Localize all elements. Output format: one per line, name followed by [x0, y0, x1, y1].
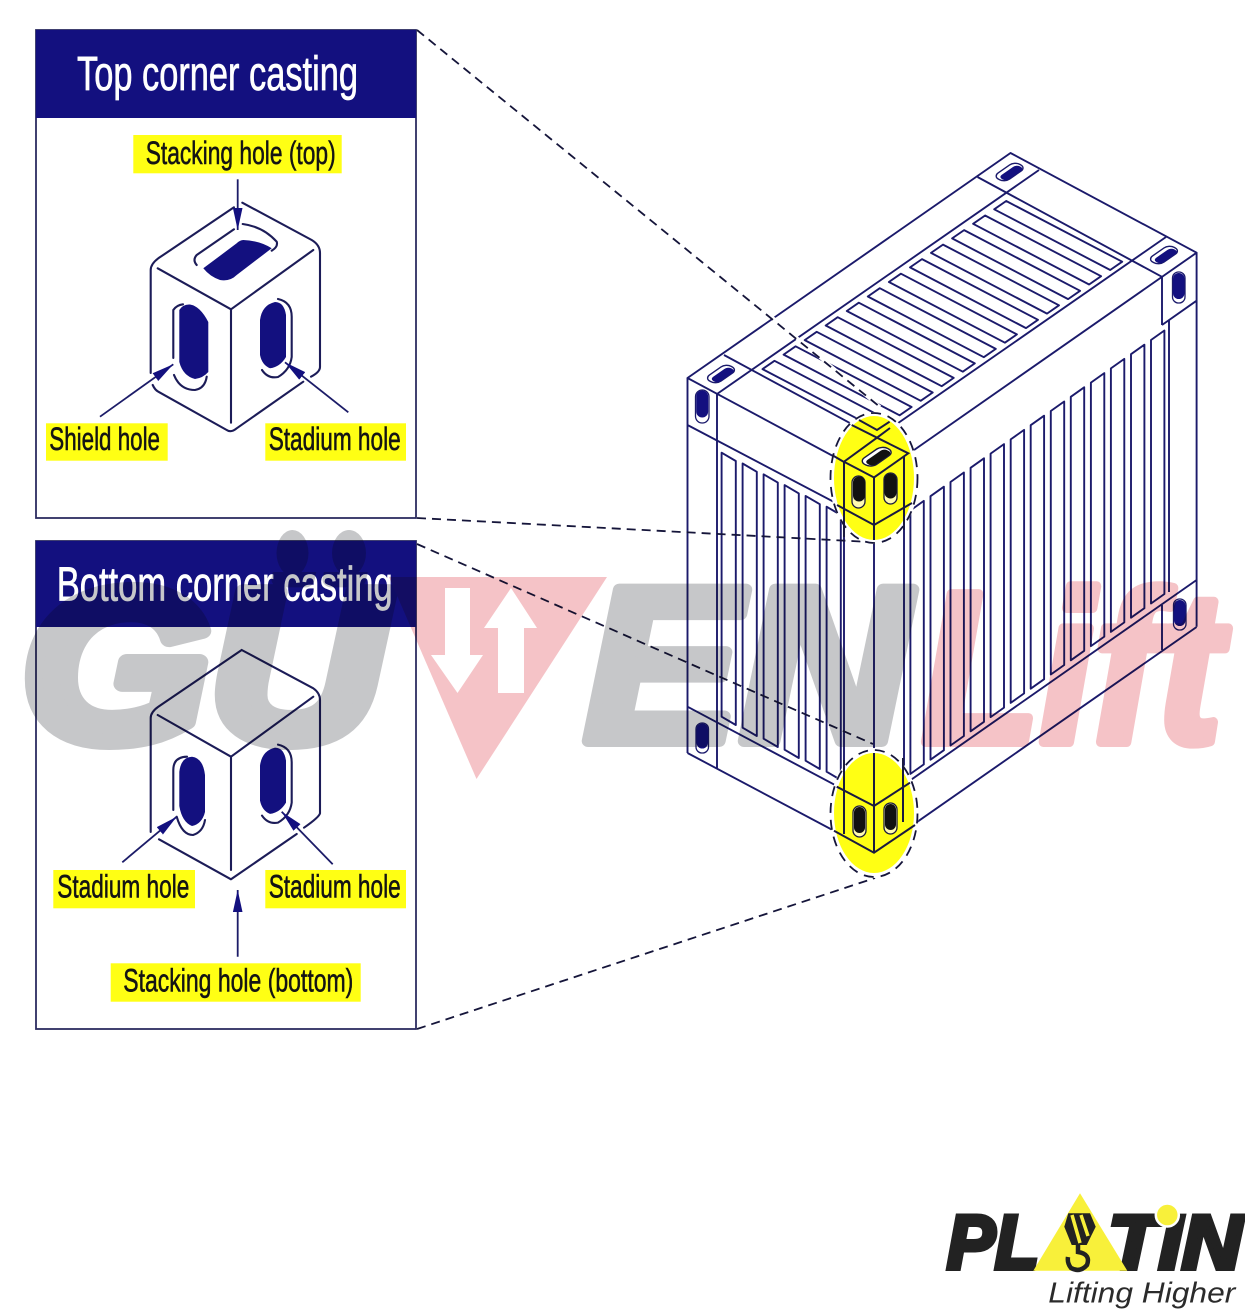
dashed connector: top panel bottom corner to container	[417, 518, 870, 542]
highlight: bottom corner casting on container	[830, 748, 918, 878]
heading: bottom corner casting: Bottom corner casting	[57, 559, 393, 612]
heading: top corner casting: Top corner casting	[77, 48, 358, 101]
arrow: to stacking hole top	[237, 179, 239, 230]
label: stacking hole bottom	[111, 963, 361, 1002]
label: stacking hole top: Stacking hole (top)	[146, 135, 336, 171]
container right face	[874, 253, 1197, 852]
dashed connector: bottom panel top corner to container	[417, 544, 873, 744]
illustration: shipping container	[688, 153, 1197, 852]
heading: bottom corner casting	[36, 541, 416, 627]
label: right stadium hole	[265, 869, 406, 908]
label: stacking hole bottom: Stacking hole (bottom)	[123, 963, 353, 999]
container left face	[688, 378, 874, 852]
label: right stadium hole: Stadium hole	[269, 869, 401, 905]
logo triangle	[1033, 1193, 1127, 1271]
logo: Platin Lifting Higher	[947, 1193, 1244, 1310]
logo wordmark left: PL	[947, 1200, 1039, 1286]
label: stacking hole top	[133, 135, 342, 173]
logo tagline: Lifting Higher	[1048, 1278, 1237, 1310]
label: shield hole: Shield hole	[49, 421, 160, 457]
icon: bottom corner casting cube	[151, 650, 320, 879]
left face corrugation ribs	[722, 453, 841, 780]
container top face	[688, 153, 1197, 478]
logo hook	[1064, 1213, 1096, 1270]
panel: bottom corner casting	[36, 541, 416, 1029]
arrow: to stacking hole bottom	[237, 890, 239, 957]
small corner casting holes	[696, 162, 1186, 753]
watermark: GÜVEN Lift: EN	[584, 542, 913, 788]
right face corrugation ribs	[910, 330, 1164, 774]
icon: top corner casting cube	[151, 203, 320, 431]
logo dot	[1156, 1204, 1179, 1226]
label: left stadium hole: Stadium hole	[57, 869, 189, 905]
label: shield hole	[46, 421, 168, 461]
arrow: to stadium hole	[285, 362, 348, 412]
dashed connector: top panel top corner to container	[417, 30, 880, 407]
panel: top corner casting	[36, 30, 416, 518]
arrow: to right stadium hole	[282, 812, 333, 864]
arrow: to left stadium hole	[122, 817, 177, 862]
heading: top corner casting	[36, 30, 416, 118]
label: stadium hole: Stadium hole	[269, 421, 401, 457]
top face roof ribs	[762, 201, 1122, 430]
label: stadium hole	[265, 421, 406, 461]
arrow: to shield hole	[100, 364, 173, 417]
logo wordmark right: TIN	[1108, 1200, 1244, 1286]
label: left stadium hole	[53, 869, 195, 908]
watermark: GÜVEN Lift	[22, 490, 1229, 788]
highlight: top corner casting on container	[830, 412, 918, 544]
dashed connector: bottom panel bottom corner to container	[417, 878, 875, 1029]
watermark: GÜVEN Lift: GÜ	[22, 545, 389, 786]
